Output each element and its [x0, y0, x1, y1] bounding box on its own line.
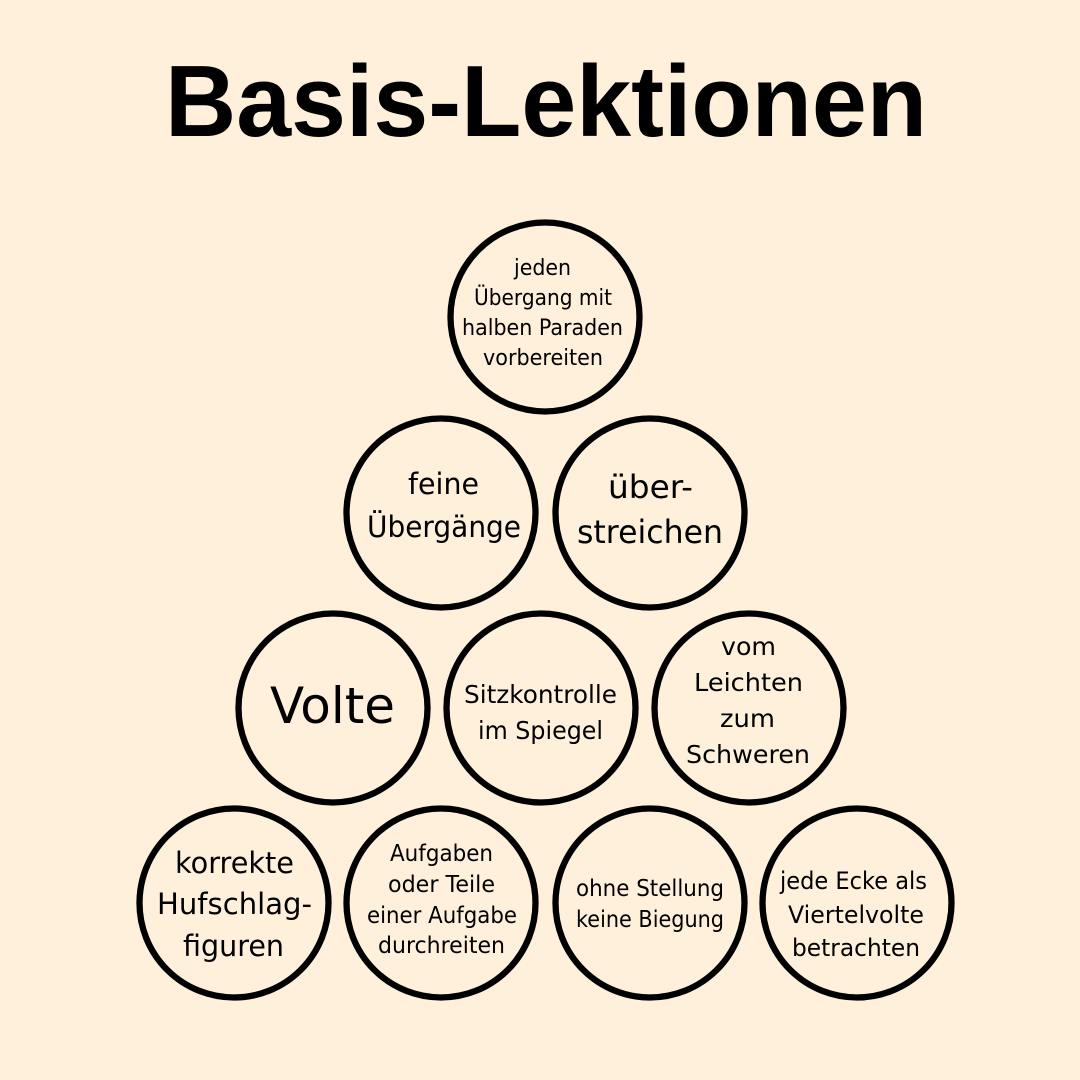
- circle: korrekte Hufschlagfiguren: figuren: [183, 929, 284, 963]
- circle: feine Übergänge: Übergänge: [367, 510, 521, 544]
- circle: über-streichen: streichen: [577, 513, 723, 551]
- circle: ohne Stellung keine Biegung: [556, 808, 744, 998]
- circle: Aufgaben oder Teile einer Aufgabe durchreiten: [346, 808, 536, 998]
- circle: feine Übergänge: [346, 418, 536, 608]
- circle: korrekte Hufschlagfiguren: [140, 808, 328, 998]
- circle: Volte: Volte: [270, 677, 395, 735]
- circle: ohne Stellung keine Biegung: ohne Stellung: [576, 876, 724, 902]
- circle: Aufgaben oder Teile einer Aufgabe durchreiten: Aufgaben: [390, 841, 493, 867]
- circle: korrekte Hufschlagfiguren: korrekte: [175, 846, 294, 880]
- circle: über-streichen: [556, 418, 744, 608]
- circle: jeden Übergang mit halben Paraden vorbereiten: halben Paraden: [462, 316, 623, 341]
- circle: vom Leichten zum Schweren: zum: [720, 704, 775, 733]
- circle: jeden Übergang mit halben Paraden vorbereiten: Übergang mit: [474, 285, 612, 311]
- circle: jede Ecke als Viertelvolte betrachten: Viertelvolte: [788, 901, 924, 929]
- circle: Sitzkontrolle im Spiegel: im Spiegel: [478, 716, 603, 745]
- circle: jede Ecke als Viertelvolte betrachten: jede Ecke als: [779, 867, 927, 895]
- circle: jeden Übergang mit halben Paraden vorbereiten: vorbereiten: [483, 346, 603, 371]
- circle: Volte: [238, 614, 428, 802]
- circle: korrekte Hufschlagfiguren: Hufschlag-: [157, 887, 312, 921]
- circle: Aufgaben oder Teile einer Aufgabe durchreiten: oder Teile: [388, 872, 495, 898]
- circle: Aufgaben oder Teile einer Aufgabe durchreiten: durchreiten: [378, 933, 505, 959]
- circle: Sitzkontrolle im Spiegel: Sitzkontrolle: [464, 680, 617, 709]
- circle: Sitzkontrolle im Spiegel: [446, 614, 636, 802]
- circle: vom Leichten zum Schweren: vom: [721, 632, 776, 661]
- circle: vom Leichten zum Schweren: [654, 614, 844, 802]
- circle: jeden Übergang mit halben Paraden vorbereiten: [450, 222, 640, 412]
- circle: vom Leichten zum Schweren: Schweren: [686, 740, 810, 769]
- circle: über-streichen: über-: [608, 468, 693, 506]
- circle: jede Ecke als Viertelvolte betrachten: [762, 808, 952, 998]
- pyramid of circles: [140, 222, 952, 998]
- circle: vom Leichten zum Schweren: Leichten: [694, 668, 803, 697]
- circle: jeden Übergang mit halben Paraden vorbereiten: jeden: [513, 256, 571, 281]
- circle: jede Ecke als Viertelvolte betrachten: betrachten: [792, 934, 920, 962]
- circle: feine Übergänge: feine: [408, 467, 479, 501]
- circle: ohne Stellung keine Biegung: keine Biegung: [576, 907, 724, 933]
- circle: Aufgaben oder Teile einer Aufgabe durchreiten: einer Aufgabe: [367, 903, 517, 929]
- title: Basis-Lektionen: [165, 46, 927, 158]
